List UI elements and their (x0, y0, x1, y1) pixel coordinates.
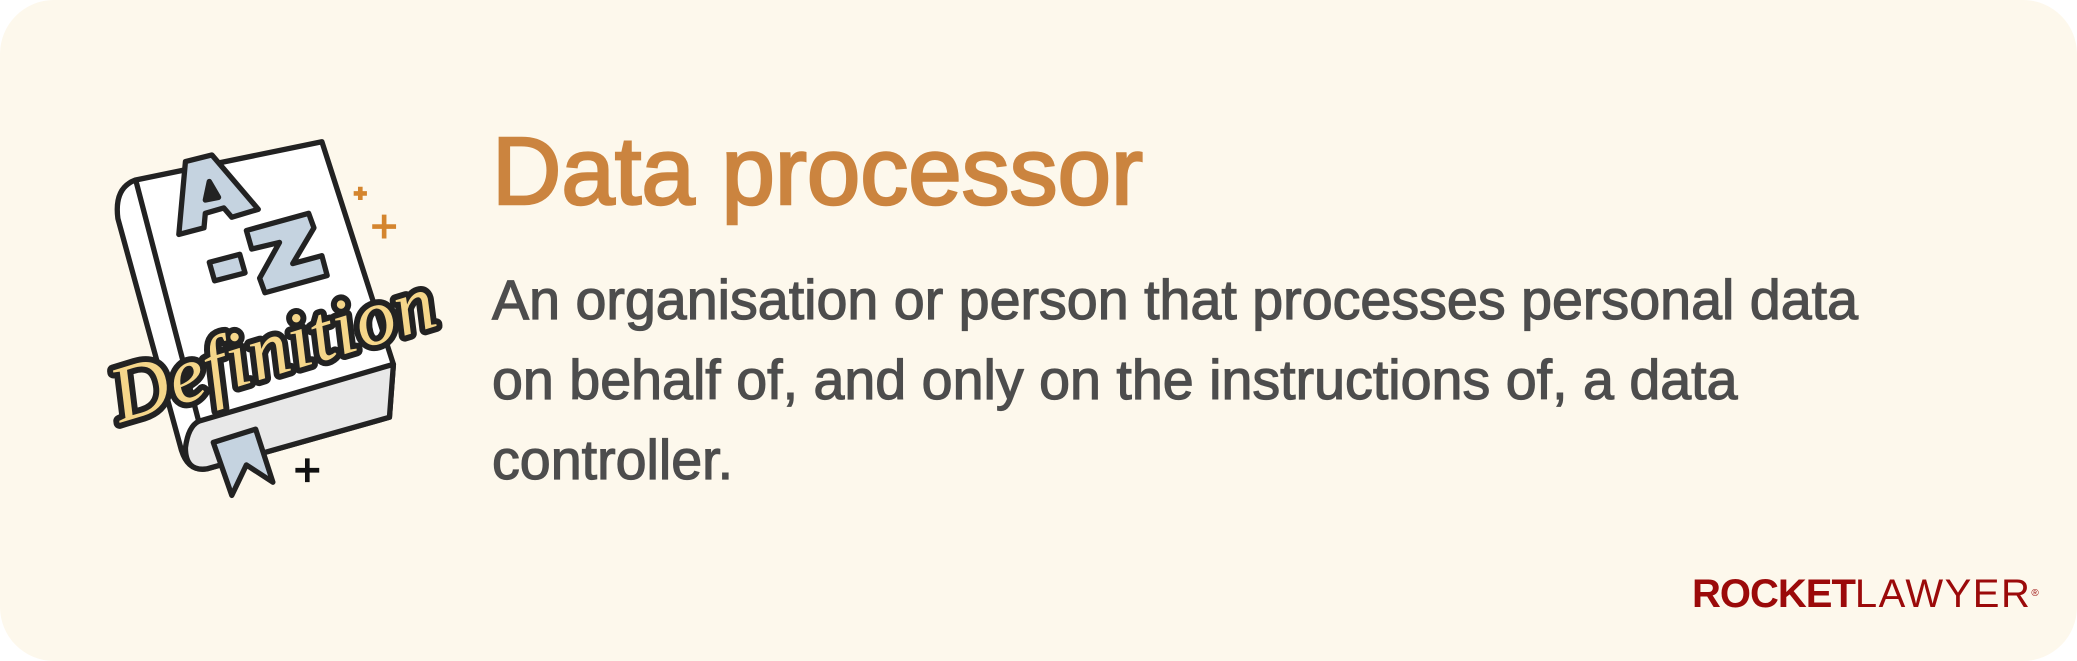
dash (209, 254, 245, 281)
definition script text: Definition (99, 258, 447, 440)
sparkles (295, 187, 396, 482)
definition text: controller. (492, 429, 733, 491)
letter Z (246, 213, 327, 293)
logo: ROCKETLAWYER® (1692, 572, 2039, 616)
definition text: An organisation or person that processes personal data (492, 269, 1858, 331)
title: Data processor (492, 118, 1143, 225)
definition text: on behalf of, and only on the instructions of, a data (492, 349, 1738, 411)
book back and pages (117, 142, 393, 469)
bookmark (213, 429, 273, 495)
letter A (179, 155, 258, 234)
definition text (491, 269, 1859, 491)
